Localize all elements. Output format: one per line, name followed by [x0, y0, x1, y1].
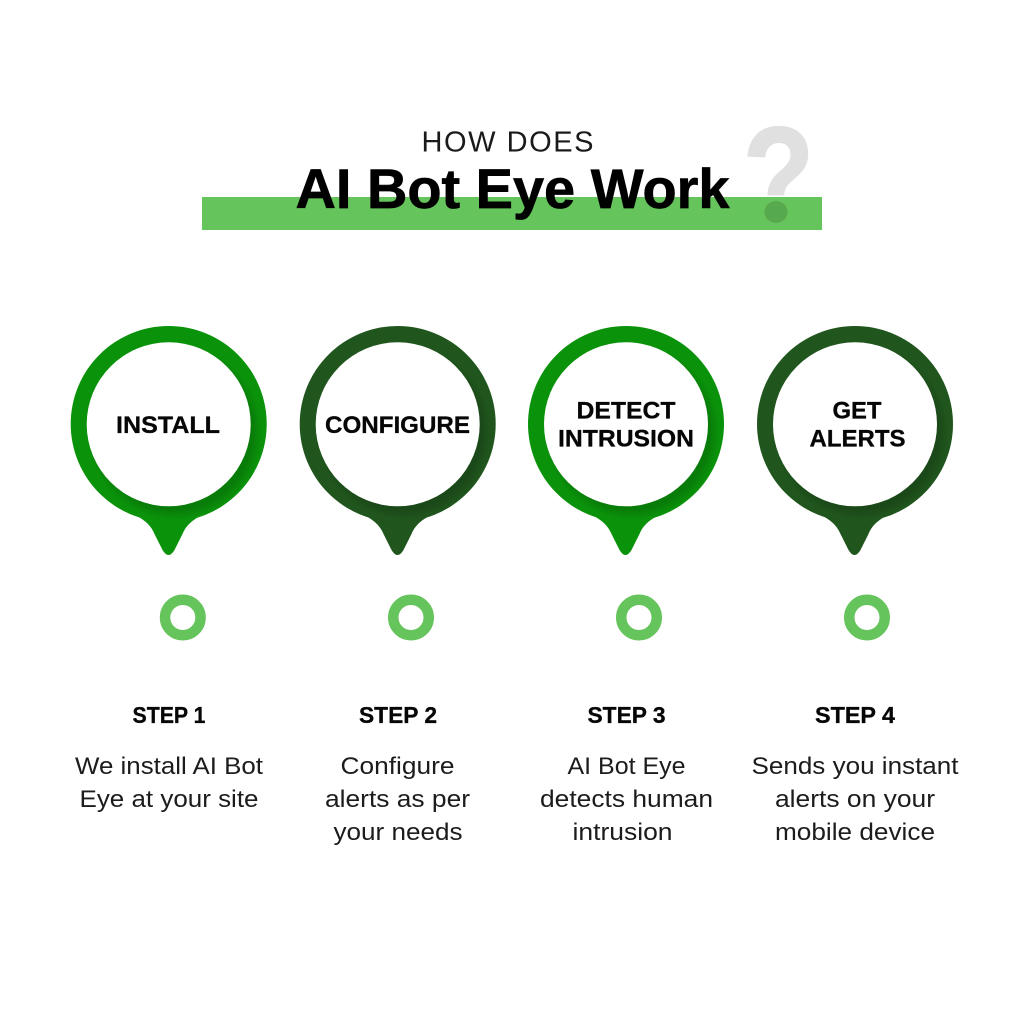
pin label: INTRUSION [558, 426, 694, 452]
step 4 text: Sends you instant [752, 753, 959, 780]
step 1 text: We install AI Bot [75, 753, 263, 780]
step 3 text [540, 702, 713, 846]
step 4 text: alerts on your [775, 786, 935, 813]
heading: AI Bot Eye Work [296, 158, 730, 220]
pin 1: install [71, 326, 267, 555]
pin label: GET [832, 398, 882, 424]
step 3 text: AI Bot Eye [568, 753, 686, 780]
pin label: ALERTS [810, 426, 906, 452]
pin label: DETECT [576, 398, 676, 424]
step 2 text: alerts as per [325, 786, 470, 813]
step 2 text: your needs [334, 819, 462, 846]
title block [202, 100, 822, 253]
pin 3: detect intrusion [528, 326, 724, 555]
step 4 text: mobile device [775, 819, 935, 846]
question mark dot over bar [764, 201, 788, 223]
pin label: INSTALL [116, 412, 220, 439]
pin 4: get alerts [757, 326, 953, 555]
step 3 text: intrusion [572, 819, 672, 846]
step 1 text: Eye at your site [80, 786, 258, 813]
pin 2: configure [300, 326, 496, 555]
question mark decoration: ? [743, 100, 814, 253]
step 4 text: STEP 4 [815, 702, 895, 728]
ring marker 1 [165, 600, 201, 635]
step 1 text [75, 702, 263, 813]
step 2 text [325, 702, 470, 846]
ring marker 4 [849, 600, 885, 635]
ring marker 3 [621, 600, 657, 635]
step 3 text: STEP 3 [588, 702, 666, 728]
green highlight bar [202, 197, 822, 230]
step 1 text: STEP 1 [132, 702, 206, 728]
step 2 text: Configure [340, 753, 454, 780]
subtitle: HOW DOES [422, 126, 594, 158]
ring marker 2 [393, 600, 429, 635]
step 4 text [752, 702, 959, 846]
step 3 text: detects human [540, 786, 713, 813]
step 2 text: STEP 2 [359, 702, 437, 728]
pin label: CONFIGURE [325, 412, 470, 439]
